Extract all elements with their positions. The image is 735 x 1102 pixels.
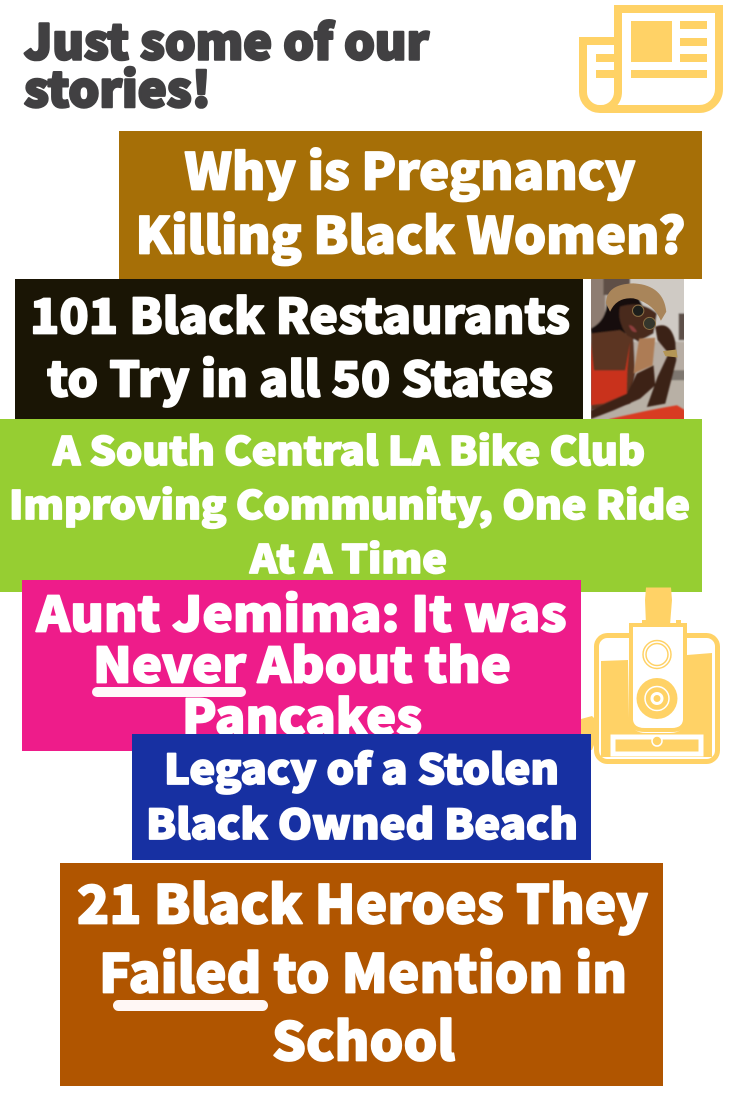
underline: Failed	[113, 1000, 268, 1011]
red skirt	[609, 405, 685, 420]
icon: newspaper	[583, 9, 719, 109]
panel: Aunt Jemima story: Never About the	[93, 626, 511, 696]
arms	[591, 365, 655, 419]
panel: restaurants story: to Try in all 50 States	[47, 340, 553, 410]
panel: bike club story: At A Time	[249, 529, 447, 585]
panel: Aunt Jemima story	[22, 576, 581, 751]
panel: black heroes story	[60, 863, 663, 1086]
clutch	[633, 338, 655, 374]
hat	[606, 283, 666, 321]
sunglasses	[632, 305, 644, 316]
icon: camera	[581, 588, 718, 762]
title: stories!	[24, 51, 211, 121]
panel: pregnancy story: Why is Pregnancy	[184, 132, 636, 204]
panel: black heroes story: Failed to Mention in	[99, 932, 627, 1008]
title	[24, 4, 430, 121]
panel: pregnancy story	[119, 131, 702, 279]
panel: pregnancy story: Killing Black Women?	[136, 196, 686, 268]
title: Just some of our	[24, 4, 430, 74]
panel: bike club story: A South Central LA Bike Club	[52, 421, 645, 477]
red dress	[591, 342, 630, 405]
panel: Aunt Jemima story: Pancakes	[182, 678, 422, 748]
panel: stolen beach story: Legacy of a Stolen	[164, 736, 559, 796]
panel: black heroes story: 21 Black Heroes They	[77, 864, 648, 940]
panel: restaurants story: 101 Black Restaurants	[30, 278, 570, 348]
face	[619, 305, 657, 342]
camera strap	[645, 588, 672, 625]
photo: woman in sunglasses	[587, 275, 689, 424]
panel: black heroes story: School	[272, 1000, 455, 1076]
hair	[591, 295, 647, 333]
panel: stolen beach story: Black Owned Beach	[146, 791, 578, 851]
panel: restaurants story	[15, 278, 583, 419]
watch	[663, 350, 678, 358]
torso	[591, 330, 635, 410]
panel: bike club story: Improving Community, One Ride	[9, 475, 690, 531]
panel: stolen beach story	[132, 734, 591, 860]
underline: Never	[92, 687, 246, 697]
panel: bike club story	[0, 419, 702, 592]
panel: Aunt Jemima story: Aunt Jemima: It was	[35, 576, 567, 646]
